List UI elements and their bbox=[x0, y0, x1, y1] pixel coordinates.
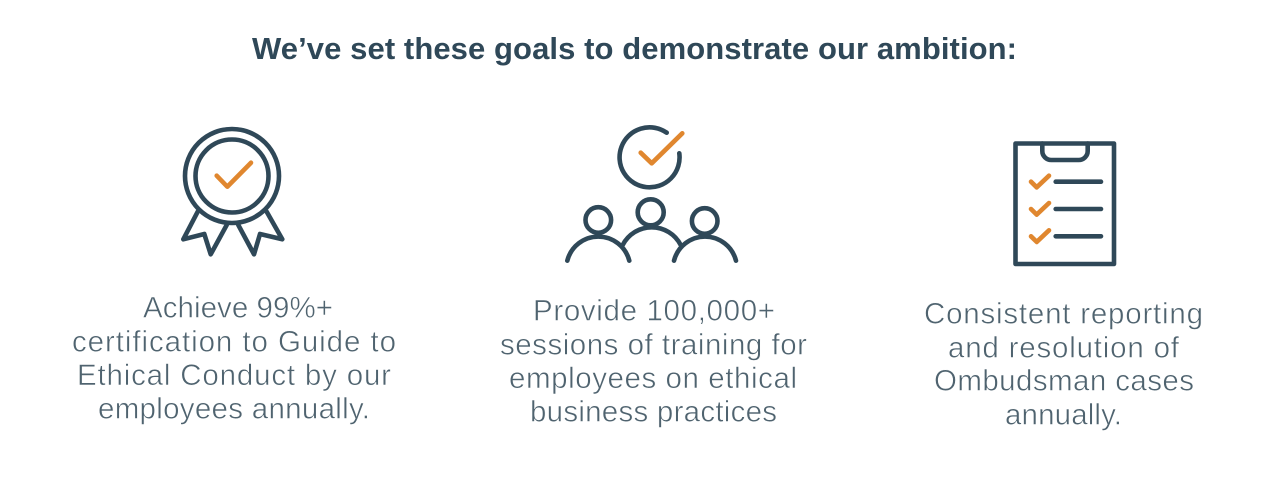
text: ombudsman goal: Consistent reporting bbox=[924, 298, 1203, 330]
text: ombudsman goal: and resolution of bbox=[948, 332, 1180, 364]
text: certification goal: certification to Guide to bbox=[72, 326, 396, 358]
text: ombudsman goal: annually. bbox=[1005, 398, 1122, 432]
text: certification goal: Achieve 99%+ bbox=[143, 292, 333, 324]
text: certification goal bbox=[72, 292, 396, 426]
panel: ombudsman goal bbox=[924, 144, 1203, 432]
panel: certification goal bbox=[72, 129, 396, 426]
icon: award rosette with check bbox=[183, 129, 282, 254]
text: training goal: business practices bbox=[530, 396, 777, 428]
text: certification goal: Ethical Conduct by our bbox=[77, 359, 391, 392]
text: training goal bbox=[500, 294, 807, 428]
text: certification goal: employees annually. bbox=[98, 392, 370, 426]
text: ombudsman goal bbox=[924, 298, 1203, 432]
title: We’ve set these goals to demonstrate our ambition: bbox=[252, 31, 1017, 66]
text: training goal: sessions of training for bbox=[500, 328, 807, 362]
text: training goal: Provide 100,000+ bbox=[533, 294, 775, 328]
icon: group of people with check bbox=[567, 127, 736, 261]
panel: training goal bbox=[500, 127, 807, 429]
text: ombudsman goal: Ombudsman cases bbox=[934, 364, 1194, 398]
text: training goal: employees on ethical bbox=[509, 362, 797, 395]
icon: clipboard checklist bbox=[1016, 144, 1114, 264]
